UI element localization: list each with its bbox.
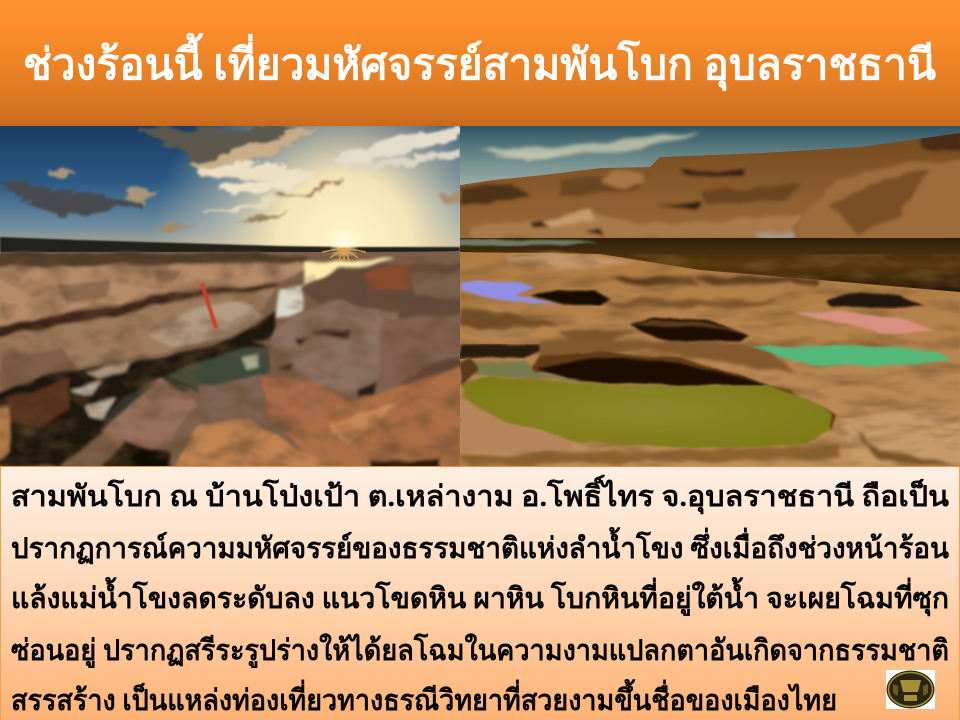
violet pool [460,282,560,305]
paragraph [11,474,949,717]
far cliff [460,130,960,245]
title banner: ช่วงร้อนนี้ เที่ยวมหัศจรรย์สามพันโบก อุบลราชธานี [23,32,937,92]
paragraph: สามพันโบก ณ บ้านโป่งเป้า ต.เหล่างาม อ.โพธิ์ไทร จ.อุบลราชธานี ถือเป็น [11,474,949,514]
photo: sunset over Sam Phan Bok rocks [0,126,460,466]
lower left rock [460,398,575,452]
rock shelf texture [460,254,960,466]
green pool [750,346,950,367]
dark pothole upper left [530,290,611,305]
dark pothole right [826,292,925,308]
rock shelf [460,245,960,466]
text panel [0,466,960,720]
rock texture [0,256,460,466]
river [460,238,960,292]
rock ground [0,252,460,466]
right-hand rocks [100,262,465,470]
pink pool [795,311,935,333]
paragraph: สรรสร้าง เป็นแหล่งท่องเที่ยวทางธรณีวิทยาที่สวยงามขึ้นชื่อของเมืองไทย [11,678,837,717]
photo: colourful rock pools [460,126,960,466]
paragraph: แล้งแม่น้ำโขงลดระดับลง แนวโขดหิน ผาหิน โบกหินที่อยู่ใต้น้ำ จะเผยโฉมที่ซุก [11,576,949,616]
title banner [0,0,960,126]
pothole left edge [460,345,540,358]
treeline horizon [0,237,460,258]
lens flare [200,283,218,328]
clouds [2,128,460,230]
emblem logo [886,670,935,709]
rock shadows [460,252,960,470]
yellow-green pool [462,352,836,447]
river water [100,261,393,430]
dark pothole centre [630,318,750,342]
sun with rays [322,232,366,262]
